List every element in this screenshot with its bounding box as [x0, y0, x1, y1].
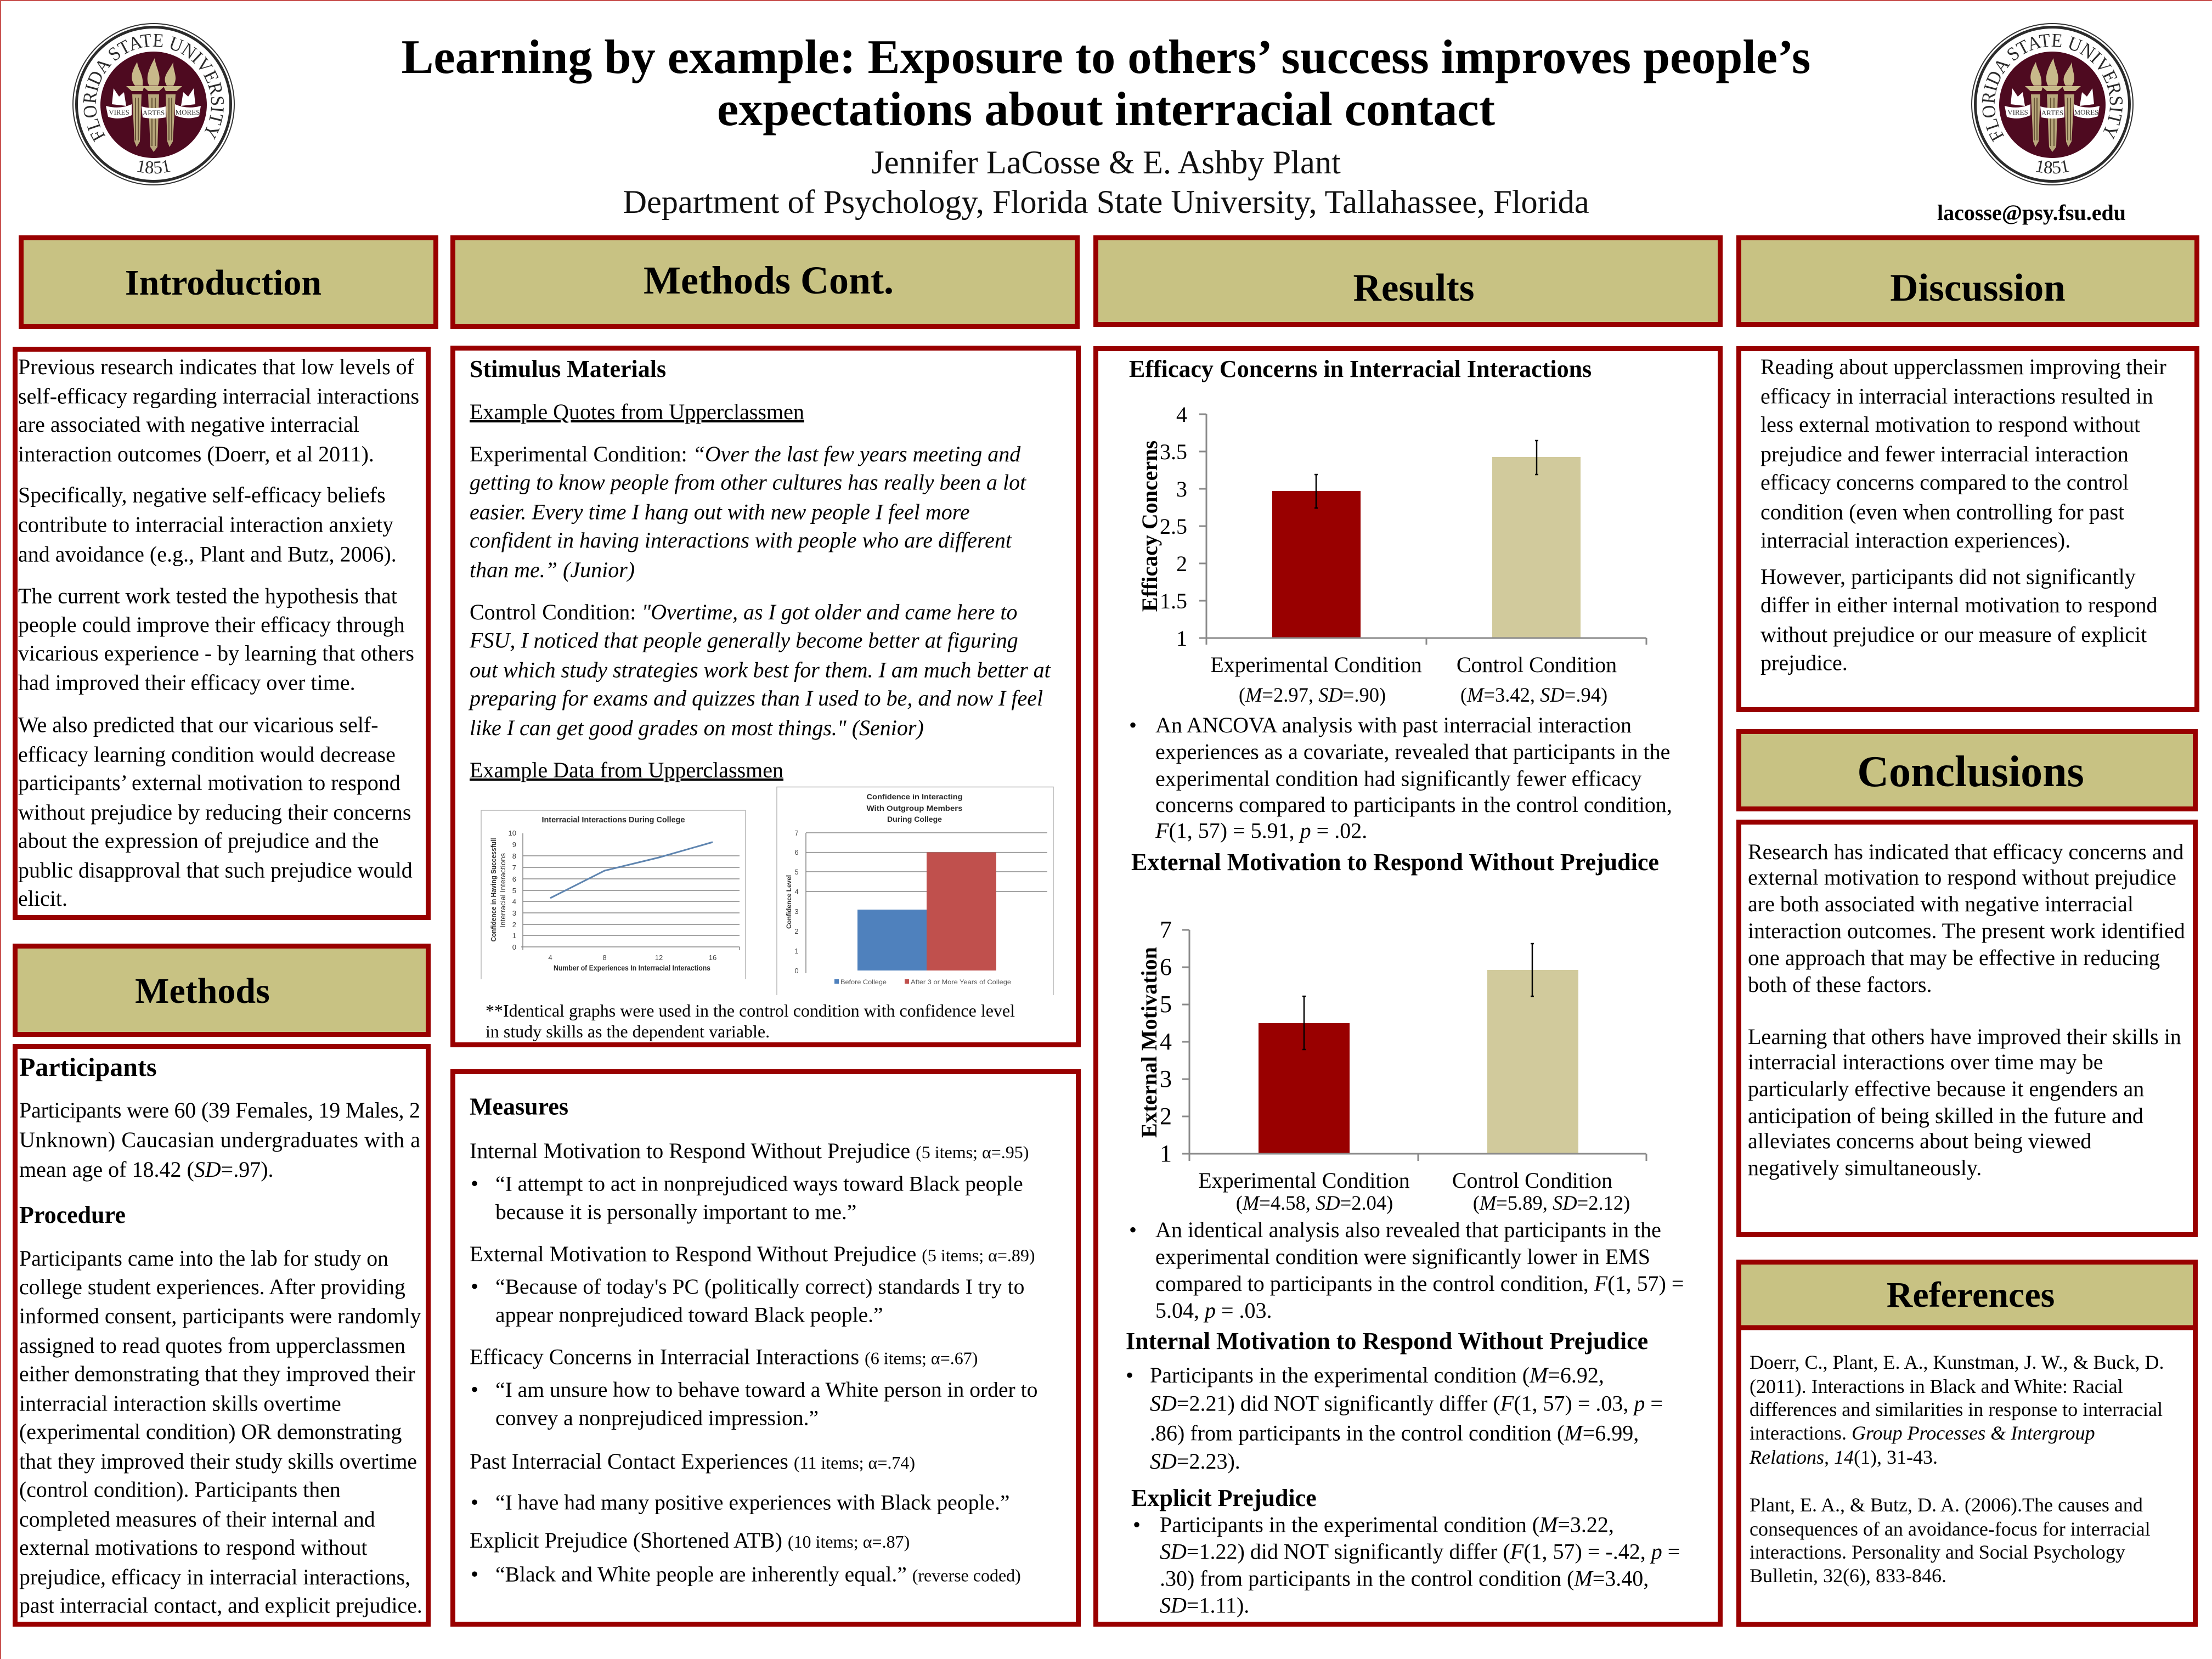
- panel: introduction: without prejudice by reducing their concerns: [18, 800, 411, 825]
- panel: discussion: efficacy in interracial interactions resulted in: [1760, 384, 2153, 408]
- panel: references: interactions. Group Processes & Intergroup: [1750, 1422, 2095, 1444]
- text: participants: [19, 1098, 420, 1182]
- panel: conclusions: Learning that others have improved their skills in: [1748, 1024, 2181, 1049]
- bar chart: efficacy concerns: 2.5: [1160, 514, 1187, 539]
- panel: conclusions: particularly effective because it engenders an: [1748, 1076, 2144, 1101]
- panel: introduction: efficacy learning condition would decrease: [18, 742, 396, 767]
- text: participants: mean age of 18.42 (SD=.97).: [19, 1157, 274, 1182]
- text: external motivation result: 5.04, p = .03.: [1155, 1298, 1272, 1323]
- bar chart: efficacy concerns: Experimental Condition: [1210, 652, 1422, 677]
- subheading: example data: Example Data from Upperclassmen: [470, 758, 783, 782]
- panel: discussion: efficacy concerns compared to the control: [1760, 470, 2129, 494]
- logo: Florida State University seal, right: ARTES: [2041, 109, 2063, 117]
- line chart: interracial interactions during college: 0: [512, 943, 516, 951]
- heading: Methods: Methods: [135, 971, 270, 1011]
- bar chart: efficacy concerns: 2: [1176, 551, 1187, 576]
- bar chart: external motivation: 7: [1160, 916, 1172, 943]
- text: procedure: (experimental condition) OR demonstrating: [19, 1420, 402, 1444]
- line chart: interracial interactions during college: 12: [655, 953, 663, 962]
- text: procedure: Participants came into the lab for study on: [19, 1246, 388, 1271]
- panel: discussion: condition (even when controlling for past: [1760, 499, 2124, 524]
- authors and affiliation: Jennifer LaCosse & E. Ashby Plant: [871, 144, 1341, 181]
- subheading: procedure: Procedure: [19, 1201, 126, 1228]
- measure: external motivation: [470, 1242, 1035, 1327]
- heading: Methods Cont.: Methods Cont.: [644, 258, 894, 302]
- bar chart: external motivation: External Motivation: [1137, 947, 1161, 1138]
- text: explicit prejudice result: SD=1.11).: [1160, 1593, 1249, 1617]
- line chart: interracial interactions during college: [481, 810, 746, 979]
- bar chart: efficacy concerns: (M=3.42, SD=.94): [1460, 684, 1607, 706]
- text: procedure: informed consent, participants were randomly: [19, 1304, 421, 1328]
- logo: Florida State University seal, left: [72, 23, 235, 185]
- text: internal motivation result: Participants in the experimental condition (M=6.92,: [1150, 1363, 1604, 1387]
- subheading: measures: Measures: [470, 1093, 568, 1120]
- measure: external motivation: appear nonprejudiced toward Black people.”: [495, 1303, 883, 1327]
- contact email: lacosse@psy.fsu.edu: [1937, 200, 2126, 225]
- panel: introduction: are associated with negative interracial: [18, 412, 359, 437]
- line chart: interracial interactions during college: Confidence in Having Successfull: [489, 838, 498, 941]
- panel: discussion: However, participants did not significantly: [1760, 565, 2136, 589]
- bar chart: confidence in interacting with outgroup members: During College: [887, 815, 942, 823]
- title: Learning by example: Exposure to others’ success improves people’s: [402, 30, 1810, 84]
- text: external motivation result: experimental condition were significantly lower in EMS: [1155, 1244, 1650, 1269]
- line chart: interracial interactions during college: 5: [512, 887, 516, 895]
- logo: Florida State University seal, left: 1851: [137, 160, 171, 173]
- text: efficacy result: concerns compared to participants in the control condition,: [1155, 792, 1672, 817]
- logo: Florida State University seal, right: VIRES: [2007, 108, 2028, 116]
- line chart: interracial interactions during college: 10: [509, 829, 516, 837]
- panel: introduction: We also predicted that our vicarious self-: [18, 713, 379, 737]
- text: procedure: past interracial contact, and explicit prejudice.: [19, 1593, 422, 1617]
- measure: efficacy concerns: [470, 1345, 1037, 1430]
- bar chart: external motivation: [1137, 916, 1646, 1214]
- bar chart: external motivation: (M=4.58, SD=2.04): [1236, 1192, 1393, 1214]
- line chart: interracial interactions during college: 3: [512, 909, 516, 917]
- panel: conclusions: anticipation of being skilled in the future and: [1748, 1103, 2143, 1128]
- panel: discussion: interracial interaction experiences).: [1760, 528, 2070, 552]
- panel: discussion: [1739, 349, 2197, 710]
- panel: introduction: interaction outcomes (Doerr, et al 2011).: [18, 442, 374, 466]
- text: internal motivation result: .86) from participants in the control condition (M=6.99,: [1150, 1421, 1639, 1445]
- line chart: interracial interactions during college: 7: [512, 864, 516, 872]
- panel: introduction: elicit.: [18, 886, 67, 911]
- text: efficacy result: [1129, 713, 1672, 843]
- line chart: interracial interactions during college: Interracial Interactions During College: [542, 816, 685, 825]
- heading: Discussion: [1739, 238, 2197, 325]
- heading: Methods: [15, 946, 428, 1035]
- panel: references: interactions. Personality and Social Psychology: [1750, 1541, 2125, 1563]
- panel: conclusions: interracial interactions over time may be: [1748, 1049, 2103, 1074]
- bar chart: confidence in interacting with outgroup members: 0: [794, 967, 799, 975]
- panel: introduction: Previous research indicates that low levels of: [18, 354, 415, 379]
- panel: references: [1739, 1328, 2196, 1624]
- heading: Results: [1096, 238, 1720, 325]
- measure: efficacy concerns: “I am unsure how to behave toward a White person in order to: [495, 1378, 1037, 1402]
- panel: references: Plant, E. A., & Butz, D. A. (2006).The causes and: [1750, 1494, 2143, 1516]
- panel: introduction: people could improve their efficacy through: [18, 612, 405, 637]
- heading: Introduction: Introduction: [125, 263, 321, 303]
- line chart: interracial interactions during college: 4: [548, 953, 552, 962]
- panel: discussion: without prejudice or our measure of explicit: [1760, 622, 2147, 647]
- measure: internal motivation: because it is personally important to me.”: [495, 1200, 856, 1224]
- text: experimental condition quote: [470, 442, 1026, 582]
- panel: results: [1096, 349, 1720, 1624]
- heading: References: [1739, 1262, 2196, 1328]
- bar chart: confidence in interacting with outgroup members: 1: [794, 947, 799, 955]
- heading: Methods Cont.: [453, 238, 1077, 327]
- panel: conclusions: Research has indicated that efficacy concerns and: [1748, 839, 2183, 864]
- bar chart: external motivation: Experimental Condition: [1198, 1168, 1410, 1193]
- subheading: stimulus materials: Stimulus Materials: [470, 356, 666, 382]
- line chart: interracial interactions during college: Interracial Interactions: [499, 853, 507, 928]
- panel: introduction: self-efficacy regarding interracial interactions: [18, 384, 419, 408]
- bar chart: external motivation: 5: [1160, 991, 1172, 1018]
- panel: conclusions: both of these factors.: [1748, 972, 1932, 997]
- panel: introduction: had improved their efficacy over time.: [18, 670, 356, 695]
- measure: explicit prejudice: •: [471, 1562, 478, 1587]
- text: control condition quote: [468, 600, 1051, 740]
- text: experimental condition quote: confident in having interactions with people who are different: [470, 528, 1012, 552]
- authors and affiliation: [623, 144, 1589, 221]
- panel: introduction: The current work tested the hypothesis that: [18, 584, 397, 608]
- panel: introduction: [15, 349, 428, 917]
- text: external motivation result: [1129, 1217, 1684, 1323]
- panel: introduction: vicarious experience - by learning that others: [18, 641, 414, 665]
- bar chart: confidence in interacting with outgroup members: 6: [794, 848, 799, 856]
- text: procedure: (control condition). Participants then: [19, 1477, 341, 1502]
- measure: explicit prejudice: “Black and White people are inherently equal.” (reverse coded): [495, 1562, 1021, 1587]
- bar chart: confidence in interacting with outgroup members: 5: [794, 868, 799, 876]
- bar chart: efficacy concerns: (M=2.97, SD=.90): [1239, 684, 1386, 706]
- bar chart: confidence in interacting with outgroup members: 2: [794, 927, 799, 935]
- panel: introduction: contribute to interracial interaction anxiety: [18, 512, 393, 537]
- logo: Florida State University seal, left: FLORIDA STATE UNIVERSITY: [83, 34, 224, 143]
- measure: past contact: •: [471, 1490, 478, 1515]
- bar chart: confidence in interacting with outgroup members: Confidence in Interacting: [867, 792, 962, 801]
- measure: explicit prejudice: [470, 1528, 1021, 1587]
- panel: conclusions: one approach that may be effective in reducing: [1748, 945, 2160, 970]
- heading: Conclusions: [1739, 732, 2196, 809]
- bar chart: confidence in interacting with outgroup members: 7: [794, 829, 799, 837]
- bar chart: confidence in interacting with outgroup members: Before College: [840, 978, 887, 986]
- panel: introduction: and avoidance (e.g., Plant and Butz, 2006).: [18, 542, 397, 566]
- text: control condition quote: Control Condition: "Overtime, as I got older and came here to: [470, 600, 1018, 624]
- text: experimental condition quote: easier. Every time I hang out with new people I feel more: [470, 499, 970, 524]
- text: procedure: interracial interaction skills overtime: [19, 1391, 341, 1415]
- line chart: interracial interactions during college: 16: [709, 953, 716, 962]
- bar chart: efficacy concerns: Control Condition: [1457, 652, 1617, 677]
- footnote: in study skills as the dependent variable.: [486, 1022, 770, 1041]
- logo: Florida State University seal, right: FLORIDA STATE UNIVERSITY: [1982, 34, 2123, 143]
- line chart: interracial interactions during college: 2: [512, 921, 516, 929]
- panel: conclusions: alleviates concerns about being viewed: [1748, 1128, 2091, 1153]
- text: control condition quote: out which study strategies work best for them. I am much better at: [470, 657, 1051, 682]
- measure: internal motivation: •: [471, 1171, 478, 1195]
- bar chart: external motivation: 4: [1160, 1028, 1172, 1055]
- bar chart: confidence in interacting with outgroup members: After 3 or More Years of College: [911, 978, 1011, 986]
- measure: external motivation: •: [471, 1274, 478, 1299]
- text: experimental condition quote: than me.” (Junior): [470, 557, 635, 582]
- panel: references: Doerr, C., Plant, E. A., Kunstman, J. W., & Buck, D.: [1750, 1351, 2164, 1373]
- logo: Florida State University seal, right: 1851: [2036, 160, 2069, 173]
- text: explicit prejudice result: Participants in the experimental condition (M=3.22,: [1160, 1513, 1614, 1537]
- text: explicit prejudice result: •: [1133, 1513, 1141, 1537]
- bar chart: efficacy concerns: 3: [1176, 477, 1187, 501]
- subheading: example quotes: Example Quotes from Upperclassmen: [470, 399, 804, 424]
- measure: explicit prejudice: Explicit Prejudice (Shortened ATB) (10 items; α=.87): [470, 1528, 910, 1553]
- panel: discussion: Reading about upperclassmen improving their: [1760, 354, 2166, 379]
- subheading: efficacy concerns: Efficacy Concerns in Interracial Interactions: [1129, 356, 1592, 382]
- text: participants: Participants were 60 (39 Females, 19 Males, 2: [19, 1098, 420, 1122]
- bar chart: external motivation: 1: [1160, 1140, 1172, 1167]
- measure: past contact: Past Interracial Contact Experiences (11 items; α=.74): [470, 1449, 915, 1474]
- panel: references: consequences of an avoidance-focus for interracial: [1750, 1518, 2151, 1540]
- text: procedure: college student experiences. After providing: [19, 1275, 405, 1299]
- logo: Florida State University seal, right: MORES: [2074, 108, 2098, 116]
- line chart: interracial interactions during college: 6: [512, 875, 516, 883]
- bar chart: efficacy concerns: 4: [1176, 402, 1187, 427]
- panel: references: Bulletin, 32(6), 833-846.: [1750, 1565, 1946, 1587]
- text: procedure: assigned to read quotes from upperclassmen: [19, 1334, 405, 1358]
- text: internal motivation result: SD=2.23).: [1150, 1449, 1240, 1474]
- text: efficacy result: An ANCOVA analysis with past interracial interaction: [1155, 713, 1632, 737]
- bar chart: confidence in interacting with outgroup members: [777, 787, 1053, 995]
- bar chart: external motivation: (M=5.89, SD=2.12): [1473, 1192, 1630, 1214]
- logo: Florida State University seal, left: MORES: [176, 108, 200, 116]
- measure: external motivation: External Motivation to Respond Without Prejudice (5 items; α=.89): [470, 1242, 1035, 1266]
- bar chart: external motivation: 2: [1160, 1103, 1172, 1130]
- subheading: participants: Participants: [19, 1053, 157, 1082]
- panel: discussion: less external motivation to respond without: [1760, 412, 2140, 437]
- bar chart: confidence in interacting with outgroup members: With Outgroup Members: [867, 804, 963, 812]
- text: explicit prejudice result: [1133, 1513, 1680, 1617]
- title: [402, 30, 1810, 136]
- text: control condition quote: like I can get good grades on most things." (Senior): [470, 715, 924, 740]
- subheading: external motivation: External Motivation to Respond Without Prejudice: [1131, 849, 1659, 876]
- bar chart: confidence in interacting with outgroup members: 4: [794, 888, 799, 896]
- text: internal motivation result: SD=2.21) did NOT significantly differ (F(1, 57) = .03, p =: [1150, 1391, 1663, 1415]
- text: experimental condition quote: Experimental Condition: “Over the last few years meeting and: [470, 442, 1021, 466]
- measure: internal motivation: “I attempt to act in nonprejudiced ways toward Black people: [495, 1171, 1023, 1195]
- text: procedure: completed measures of their internal and: [19, 1507, 375, 1531]
- text: internal motivation result: [1126, 1363, 1663, 1474]
- panel: discussion: prejudice.: [1760, 651, 1848, 675]
- measure: past contact: “I have had many positive experiences with Black people.”: [495, 1491, 1009, 1515]
- panel: measures: [453, 1072, 1079, 1624]
- panel: methods continued: [453, 348, 1079, 1045]
- bar chart: confidence in interacting with outgroup members: Confidence Level: [785, 875, 793, 929]
- panel: conclusions: negatively simultaneously.: [1748, 1155, 1982, 1180]
- footnote: [486, 1001, 1015, 1041]
- text: efficacy result: F(1, 57) = 5.91, p = .02.: [1155, 819, 1367, 843]
- panel: references: (2011). Interactions in Black and White: Racial: [1750, 1375, 2123, 1397]
- heading: Results: Results: [1353, 267, 1474, 309]
- panel: introduction: public disapproval that such prejudice would: [18, 858, 413, 882]
- subheading: internal motivation: Internal Motivation to Respond Without Prejudice: [1126, 1328, 1648, 1355]
- logo: Florida State University seal, left: VIRES: [109, 108, 129, 116]
- title: expectations about interracial contact: [717, 82, 1495, 136]
- text: procedure: that they improved their study skills overtime: [19, 1449, 417, 1474]
- bar chart: external motivation: 3: [1160, 1065, 1172, 1092]
- measure: internal motivation: [470, 1138, 1029, 1224]
- measure: internal motivation: Internal Motivation to Respond Without Prejudice (5 items; α=.95): [470, 1138, 1029, 1163]
- text: procedure: either demonstrating that they improved their: [19, 1362, 415, 1386]
- bar chart: confidence in interacting with outgroup members: 3: [794, 907, 799, 916]
- text: efficacy result: experimental condition had significantly fewer efficacy: [1155, 766, 1642, 791]
- panel: conclusions: [1739, 822, 2196, 1234]
- authors and affiliation: Department of Psychology, Florida State University, Tallahassee, Florida: [623, 184, 1589, 221]
- bar chart: efficacy concerns: [1137, 402, 1646, 706]
- footnote: **Identical graphs were used in the control condition with confidence level: [486, 1001, 1015, 1020]
- bar chart: efficacy concerns: 1: [1176, 626, 1187, 651]
- panel: conclusions: interaction outcomes. The present work identified: [1748, 918, 2185, 943]
- line chart: interracial interactions during college: 9: [512, 840, 516, 849]
- panel: references: Relations, 14(1), 31-43.: [1749, 1446, 1938, 1468]
- logo: Florida State University seal, right: [1971, 23, 2134, 185]
- panel: introduction: participants’ external motivation to respond: [18, 770, 400, 795]
- text: control condition quote: FSU, I noticed that people generally become better at figuring: [469, 628, 1018, 652]
- heading: Discussion: Discussion: [1890, 267, 2066, 309]
- bar chart: efficacy concerns: 3.5: [1160, 439, 1187, 464]
- text: experimental condition quote: getting to know people from other cultures has really been a lot: [470, 470, 1026, 494]
- panel: conclusions: external motivation to respond without prejudice: [1748, 865, 2176, 889]
- text: procedure: prejudice, efficacy in interracial interactions,: [19, 1565, 410, 1589]
- heading: References: References: [1887, 1275, 2055, 1315]
- line chart: interracial interactions during college: 8: [602, 953, 607, 962]
- measure: efficacy concerns: •: [471, 1377, 478, 1402]
- measure: past contact: [470, 1449, 1009, 1515]
- text: control condition quote: preparing for exams and quizzes than I used to be, and now I feel: [468, 686, 1043, 710]
- text: external motivation result: •: [1129, 1217, 1137, 1242]
- logo: Florida State University seal, left: ARTES: [143, 109, 165, 117]
- bar chart: external motivation: Control Condition: [1452, 1168, 1612, 1193]
- measure: efficacy concerns: convey a nonprejudiced impression.”: [495, 1406, 819, 1430]
- text: efficacy result: •: [1129, 713, 1137, 737]
- bar chart: efficacy concerns: Efficacy Concerns: [1137, 441, 1162, 612]
- line chart: interracial interactions during college: Number of Experiences In Interracial Interactions: [554, 964, 710, 972]
- text: efficacy result: experiences as a covariate, revealed that participants in the: [1155, 740, 1670, 764]
- text: procedure: external motivations to respond without: [19, 1536, 367, 1560]
- text: explicit prejudice result: SD=1.22) did NOT significantly differ (F(1, 57) = -.42, p =: [1160, 1539, 1680, 1564]
- line chart: interracial interactions during college: 8: [512, 852, 516, 860]
- text: explicit prejudice result: .30) from participants in the control condition (M=3.40,: [1160, 1566, 1649, 1590]
- text: internal motivation result: •: [1126, 1363, 1133, 1387]
- text: participants: Unknown) Caucasian undergraduates with a: [19, 1127, 420, 1152]
- line chart: interracial interactions during college: 4: [512, 898, 516, 906]
- heading: Conclusions: Conclusions: [1857, 748, 2084, 796]
- panel: introduction: Specifically, negative self-efficacy beliefs: [18, 483, 386, 507]
- panel: conclusions: are both associated with negative interracial: [1748, 891, 2134, 916]
- measure: efficacy concerns: Efficacy Concerns in Interracial Interactions (6 items; α=.67): [470, 1345, 978, 1369]
- text: external motivation result: An identical analysis also revealed that participants in the: [1155, 1217, 1661, 1242]
- line chart: interracial interactions during college: 1: [512, 932, 516, 940]
- panel: methods: [15, 1047, 428, 1624]
- panel: references: differences and similarities in response to interracial: [1750, 1398, 2163, 1420]
- measure: external motivation: “Because of today's PC (politically correct) standards I try to: [495, 1274, 1024, 1299]
- heading: Introduction: [21, 238, 436, 327]
- bar chart: external motivation: 6: [1160, 953, 1172, 980]
- text: procedure: [19, 1246, 422, 1617]
- panel: discussion: differ in either internal motivation to respond: [1760, 592, 2158, 617]
- text: external motivation result: compared to participants in the control condition, F(1, 57) =: [1155, 1271, 1684, 1296]
- bar chart: efficacy concerns: 1.5: [1160, 589, 1187, 613]
- panel: discussion: prejudice and fewer interracial interaction: [1760, 442, 2129, 466]
- subheading: explicit prejudice: Explicit Prejudice: [1131, 1485, 1317, 1511]
- panel: introduction: about the expression of prejudice and the: [18, 828, 379, 853]
